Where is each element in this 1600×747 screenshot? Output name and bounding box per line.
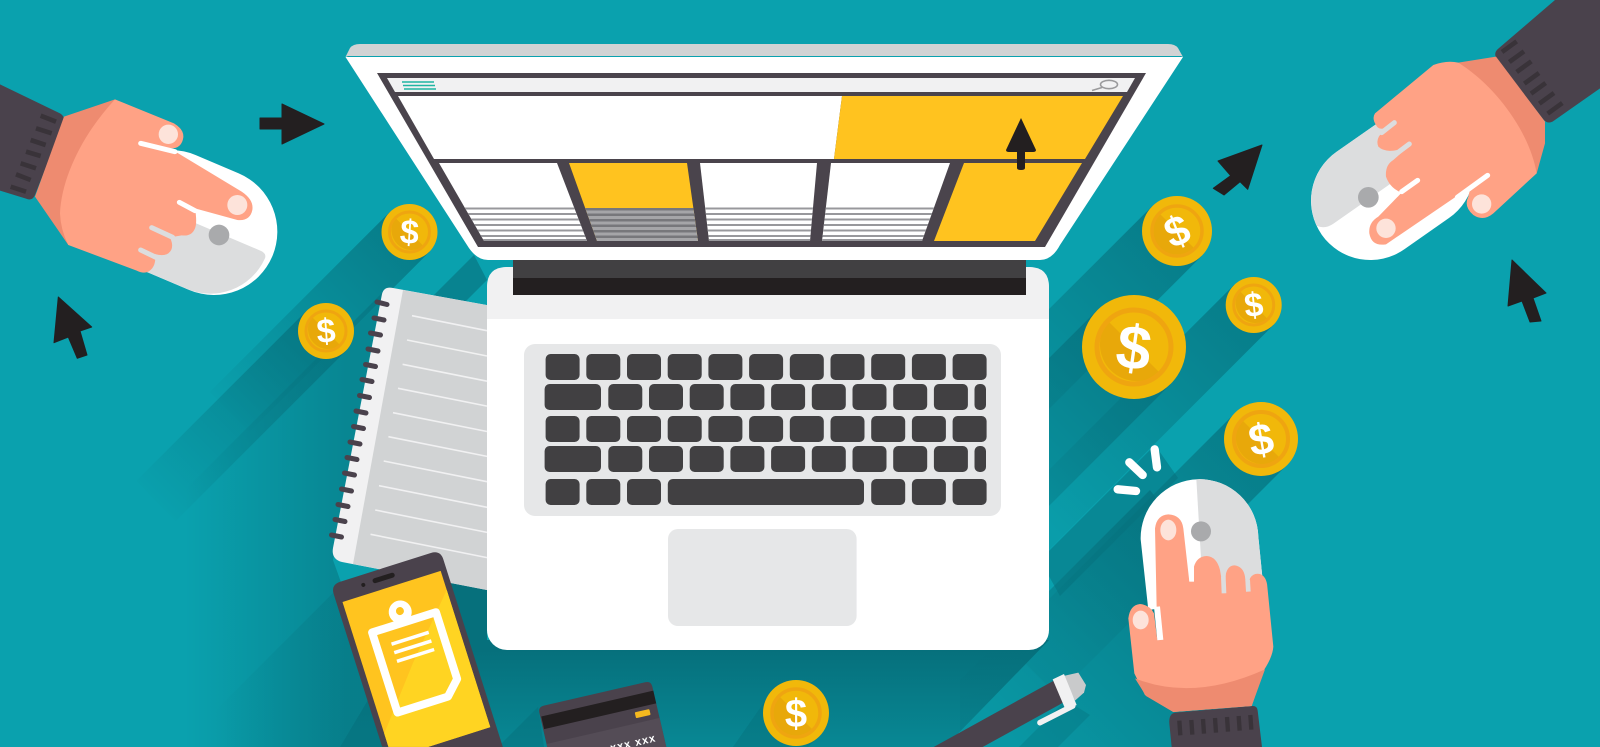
pen	[934, 673, 1086, 747]
laptop hinge	[513, 258, 1026, 295]
coin left: $	[315, 312, 337, 351]
hand with mouse: top right	[1288, 0, 1600, 283]
hand	[1128, 514, 1273, 712]
laptop screen	[346, 44, 1183, 260]
sleeve	[1169, 706, 1262, 747]
coin lower right: $	[1245, 414, 1277, 466]
product card 5	[934, 163, 1082, 241]
coin upper right: $	[1157, 205, 1197, 257]
coin left	[298, 303, 354, 359]
click ticks	[1118, 449, 1157, 491]
phone	[331, 550, 503, 747]
arrow: cursor far right	[1508, 260, 1546, 322]
laptop base	[487, 267, 1049, 650]
mouse	[1288, 87, 1498, 283]
credit card	[538, 681, 666, 747]
product card 1	[439, 163, 590, 241]
arrow: cursor upper right	[1213, 145, 1262, 195]
coin top left: $	[399, 213, 420, 252]
coin lower right	[1224, 402, 1298, 476]
clipboard icon	[365, 591, 461, 713]
arrow: cursor upper left	[54, 297, 92, 358]
coin small right: $	[1242, 286, 1265, 325]
notebook	[332, 288, 492, 591]
hand with mouse: bottom right	[1128, 473, 1273, 747]
coin large: $	[1112, 312, 1156, 385]
hand	[60, 99, 253, 273]
wrist	[1135, 669, 1265, 712]
coin bottom: $	[785, 692, 807, 736]
trackpad	[668, 529, 857, 626]
coin small right	[1226, 277, 1282, 333]
product card 2	[569, 163, 698, 241]
hand	[1369, 62, 1537, 245]
hand with mouse: top left	[0, 84, 297, 315]
product card 4	[815, 163, 955, 241]
long diagonal shadows	[100, 206, 1287, 747]
coin bottom	[763, 680, 829, 746]
coin top left	[382, 204, 438, 260]
coin large	[1082, 295, 1186, 399]
arrow: cursor right	[260, 104, 324, 144]
mouse	[1141, 479, 1264, 610]
wrist	[35, 99, 133, 245]
arrow: cursor on screen	[1006, 118, 1036, 170]
keyboard	[524, 344, 1001, 516]
sleeve	[0, 84, 64, 199]
sleeve	[1495, 0, 1600, 123]
hero row	[398, 96, 1123, 159]
product card 3	[695, 163, 825, 241]
coin upper right	[1142, 196, 1212, 266]
address bar	[387, 78, 1135, 92]
mouse	[88, 130, 297, 315]
wrist	[1458, 57, 1545, 173]
